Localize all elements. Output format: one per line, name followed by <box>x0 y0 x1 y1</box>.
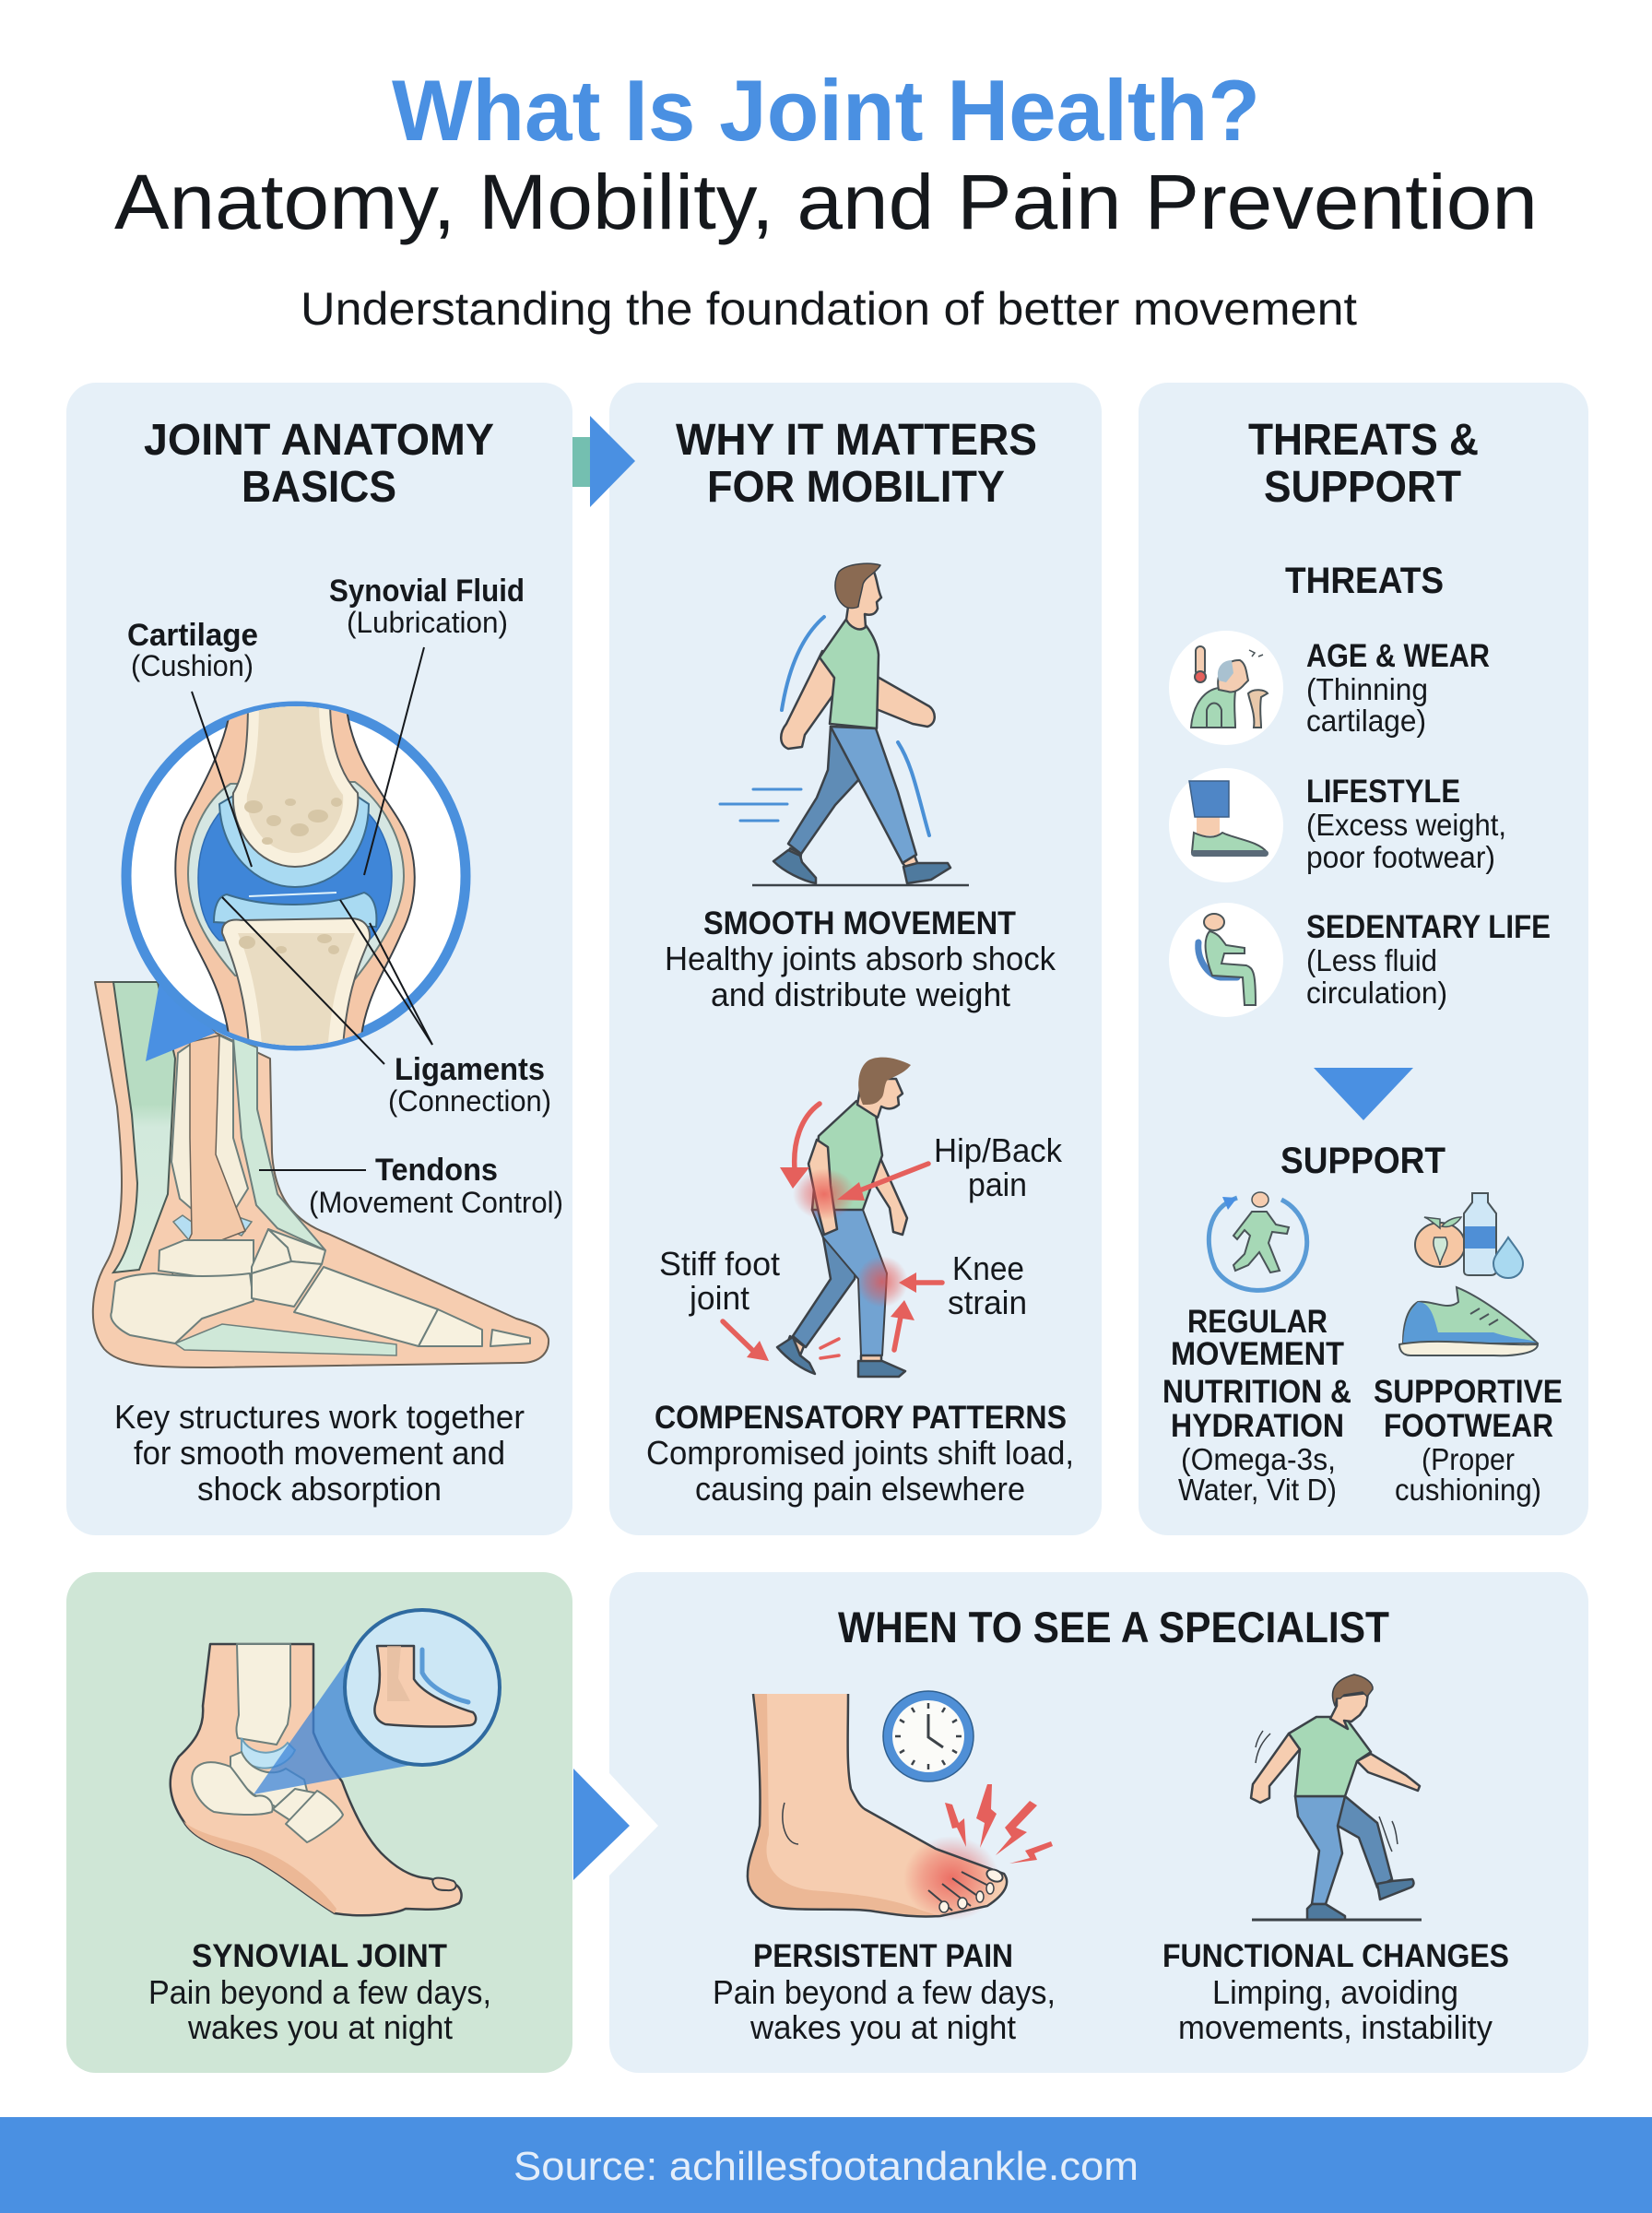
text: persistent pain: wakes you at night <box>749 2008 1016 2046</box>
text: compensatory patterns <box>646 1400 1074 1508</box>
text: synovial joint <box>148 1938 491 2046</box>
text: functional changes <box>1162 1938 1509 2046</box>
caption: key structures: shock absorption <box>197 1470 442 1508</box>
heading: threats and support: THREATS & <box>1248 416 1479 465</box>
text: sedentary life <box>1306 909 1551 1010</box>
label: ligaments <box>388 1052 551 1118</box>
text: compensatory patterns: causing pain elsewhere <box>695 1470 1025 1508</box>
panel: when to see a specialist <box>609 1572 1588 2073</box>
text: sedentary life: circulation) <box>1306 976 1447 1010</box>
magnifier beam <box>254 1656 412 1794</box>
label: hip/back pain: pain <box>968 1166 1027 1203</box>
heading: joint anatomy basics: JOINT ANATOMY <box>144 416 494 465</box>
illustration: compensating figure <box>723 1058 942 1377</box>
icon: regular movement <box>1209 1192 1307 1290</box>
heading: threats and support <box>1248 416 1479 512</box>
text: functional changes: movements, instability <box>1178 2008 1493 2046</box>
text: lifestyle: poor footwear) <box>1306 840 1495 874</box>
text: supportive footwear: cushioning) <box>1395 1473 1541 1507</box>
text: supportive footwear: SUPPORTIVE <box>1374 1374 1563 1410</box>
text: age and wear <box>1306 638 1490 738</box>
heading: when to see a specialist: WHEN TO SEE A SPECIALIST <box>838 1603 1389 1651</box>
text: nutrition and hydration: Water, Vit D) <box>1178 1473 1337 1507</box>
text: lifestyle: LIFESTYLE <box>1306 774 1460 810</box>
text: nutrition and hydration: (Omega-3s, <box>1181 1442 1336 1476</box>
label: stiff foot joint <box>659 1245 780 1317</box>
text: persistent pain <box>713 1938 1056 2046</box>
text: age and wear: (Thinning <box>1306 672 1428 706</box>
arrow: threats to support <box>1314 1068 1413 1120</box>
text: synovial joint: Pain beyond a few days, <box>148 1973 491 2011</box>
text: regular movement: MOVEMENT <box>1171 1336 1344 1372</box>
label: knee strain <box>948 1249 1027 1321</box>
label: tendons <box>309 1153 563 1219</box>
text: supportive footwear: (Proper <box>1422 1442 1515 1476</box>
illustration: ankle with magnifier <box>171 1644 462 1915</box>
text: age and wear: cartilage) <box>1306 704 1426 738</box>
title <box>114 62 1538 245</box>
text: persistent pain: Pain beyond a few days, <box>713 1973 1056 2011</box>
text: functional changes: Limping, avoiding <box>1212 1973 1458 2011</box>
illustration: limping figure <box>1251 1675 1422 1920</box>
illustration: painful foot <box>748 1694 1007 1921</box>
heading: why it matters: WHY IT MATTERS <box>676 416 1037 465</box>
icon: pain bolts <box>945 1784 1053 1864</box>
panel: joint anatomy basics <box>66 383 572 1535</box>
text: supportive footwear <box>1374 1374 1563 1507</box>
label: cartilage: Cartilage <box>127 618 258 653</box>
magnifier inset <box>345 1610 500 1765</box>
panel: why it matters for mobility <box>609 383 1102 1535</box>
heading: joint anatomy basics <box>144 416 494 512</box>
panel: threats and support <box>1139 383 1588 1535</box>
text: compensatory patterns: Compromised joints shift load, <box>646 1434 1074 1472</box>
leader lines <box>192 647 432 1170</box>
text: synovial joint: SYNOVIAL JOINT <box>192 1938 447 1974</box>
text: smooth movement <box>665 905 1056 1013</box>
heading: why it matters: FOR MOBILITY <box>707 463 1005 512</box>
icon: lifestyle <box>1169 768 1283 882</box>
text: lifestyle: (Excess weight, <box>1306 808 1506 842</box>
text: smooth movement: Healthy joints absorb shock <box>665 940 1056 977</box>
title: What Is Joint Health? <box>392 62 1260 159</box>
subheading: support: SUPPORT <box>1280 1141 1446 1181</box>
heading: joint anatomy basics: BASICS <box>242 463 396 512</box>
subtitle: Understanding the foundation of better movement <box>301 283 1357 335</box>
label: stiff foot joint: Stiff foot <box>659 1245 780 1283</box>
caption: key structures: Key structures work together <box>114 1398 525 1436</box>
label: tendons: (Movement Control) <box>309 1186 563 1219</box>
footer source bar <box>0 2117 1652 2213</box>
label: ligaments: Ligaments <box>395 1052 545 1087</box>
icon: age and wear <box>1169 631 1283 745</box>
panel: synovial joint <box>66 1572 572 2073</box>
label: ligaments: (Connection) <box>388 1084 551 1118</box>
icon: clock <box>883 1691 974 1781</box>
text: nutrition and hydration <box>1162 1374 1351 1507</box>
text: sedentary life: (Less fluid <box>1306 943 1437 977</box>
footer source bar: Source: achillesfootandankle.com <box>513 2144 1139 2189</box>
heading: why it matters <box>676 416 1037 512</box>
text: regular movement <box>1171 1304 1344 1372</box>
arrow: anatomy to mobility <box>572 416 635 507</box>
text: smooth movement: and distribute weight <box>711 976 1010 1013</box>
label: cartilage <box>127 618 258 682</box>
magnified joint lens <box>126 701 466 1060</box>
title: Anatomy, Mobility, and Pain Prevention <box>114 159 1538 245</box>
label: hip/back pain: Hip/Back <box>934 1131 1063 1169</box>
label: synovial fluid: (Lubrication) <box>347 606 508 639</box>
text: regular movement: REGULAR <box>1187 1304 1328 1340</box>
label: hip/back pain <box>934 1131 1063 1203</box>
text: functional changes: FUNCTIONAL CHANGES <box>1162 1938 1509 1974</box>
caption: key structures <box>114 1398 525 1508</box>
label: knee strain: Knee <box>952 1249 1024 1287</box>
label: cartilage: (Cushion) <box>131 649 254 682</box>
text: nutrition and hydration: HYDRATION <box>1171 1408 1344 1444</box>
magnifier pointer <box>146 982 216 1061</box>
text: nutrition and hydration: NUTRITION & <box>1162 1374 1351 1410</box>
arrow: synovial joint to specialist <box>573 1769 658 1880</box>
label: tendons: Tendons <box>375 1153 498 1188</box>
text: compensatory patterns: COMPENSATORY PATTERNS <box>655 1400 1067 1436</box>
label: stiff foot joint: joint <box>689 1279 749 1317</box>
text: supportive footwear: FOOTWEAR <box>1384 1408 1553 1444</box>
label: synovial fluid <box>329 574 525 639</box>
label: knee strain: strain <box>948 1284 1027 1321</box>
illustration: healthy walking figure <box>720 563 969 885</box>
label: synovial fluid: Synovial Fluid <box>329 574 525 609</box>
heading: threats and support: SUPPORT <box>1264 463 1461 512</box>
illustration: foot cross-section <box>93 982 549 1367</box>
subheading: threats: THREATS <box>1285 561 1444 601</box>
text: age and wear: AGE & WEAR <box>1306 638 1490 674</box>
icon: nutrition and footwear <box>1399 1193 1538 1355</box>
caption: key structures: for smooth movement and <box>134 1434 505 1472</box>
text: persistent pain: PERSISTENT PAIN <box>753 1938 1013 1974</box>
text: lifestyle <box>1306 774 1506 874</box>
text: sedentary life: SEDENTARY LIFE <box>1306 909 1551 945</box>
text: synovial joint: wakes you at night <box>187 2008 453 2046</box>
icon: sedentary life <box>1169 903 1283 1017</box>
text: smooth movement: SMOOTH MOVEMENT <box>703 905 1016 941</box>
